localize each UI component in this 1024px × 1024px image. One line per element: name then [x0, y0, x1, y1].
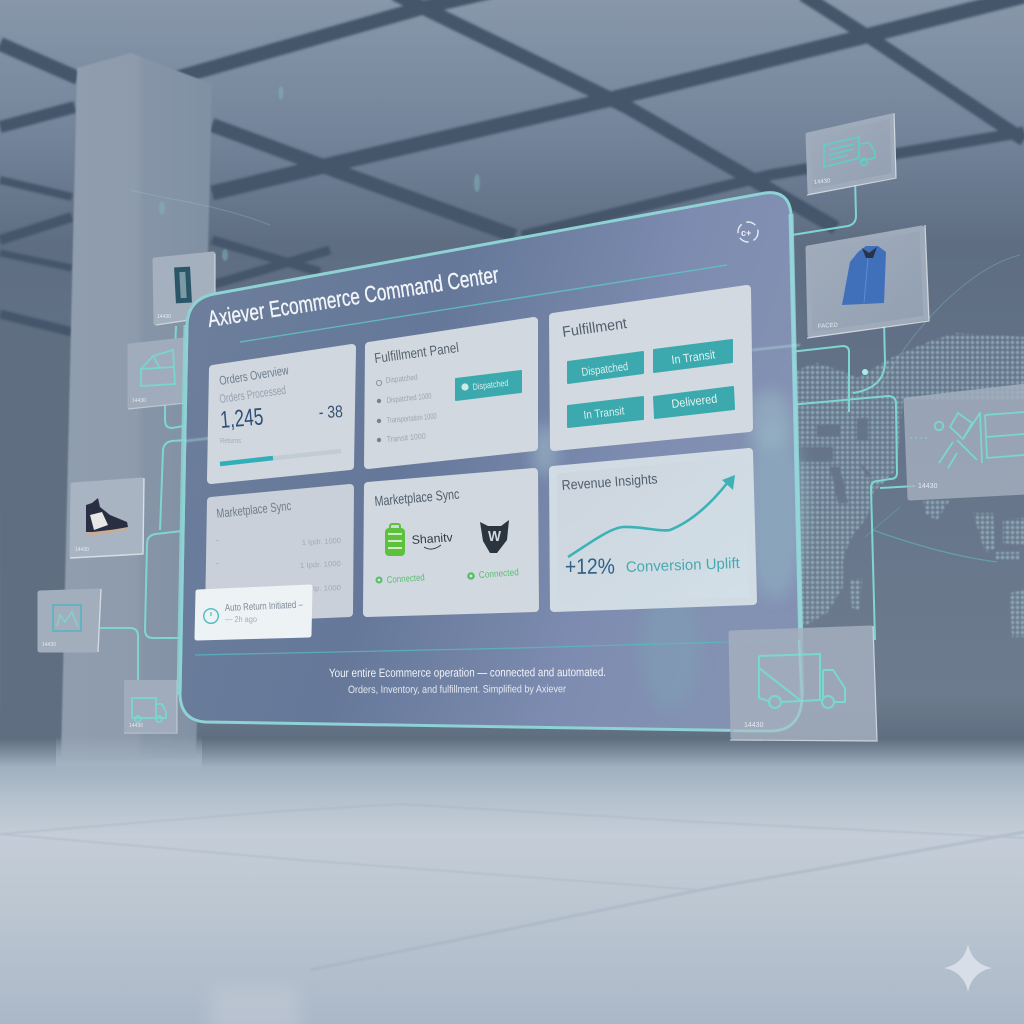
side card: delivery van invoice: 14430 — [814, 178, 831, 186]
glow: map through glass — [533, 390, 805, 710]
card: fulfillment panel: Dispatched — [385, 373, 418, 385]
card: revenue insights: +12% — [565, 554, 615, 579]
card: fulfillment status: Delivered — [671, 391, 718, 411]
card: marketplace sync connected: Marketplace Sync — [374, 486, 460, 509]
card: revenue insights: Conversion Uplift — [626, 555, 741, 576]
card: marketplace sync connected: Connected — [386, 572, 425, 586]
card: fulfillment status: Fulfillment — [561, 315, 629, 341]
shield logo: W — [488, 528, 502, 545]
footer text — [329, 665, 606, 696]
main glass dashboard panel — [179, 193, 805, 731]
side card: sneaker — [70, 478, 144, 558]
side card: sneaker: 14430 — [75, 547, 89, 553]
toast: auto return initiated: — 2h ago — [225, 615, 257, 624]
side card: large delivery truck — [730, 626, 877, 741]
card: orders overview: Returns — [220, 438, 241, 445]
toast: auto return initiated — [197, 587, 310, 638]
card: marketplace sync list — [209, 488, 350, 619]
panel title: Axiever Ecommerce Command Center — [206, 261, 501, 332]
card: fulfillment status — [553, 289, 749, 447]
card: revenue insights: Revenue Insights — [561, 470, 658, 493]
side card: package icon: 14430 — [132, 398, 146, 404]
side card: analytics chart — [40, 589, 101, 652]
side card: large delivery truck: 14430 — [744, 722, 764, 729]
card: marketplace sync connected: Connected — [478, 567, 519, 581]
shield logo — [480, 520, 509, 553]
side card: small delivery truck — [124, 680, 177, 733]
side card: map route — [906, 386, 1024, 498]
card: fulfillment panel: Transit 1000 — [386, 432, 427, 444]
card: orders overview: - 38 — [318, 402, 343, 422]
side card: package icon — [128, 340, 186, 409]
card: orders overview: 1,245 — [219, 403, 264, 434]
card: orders overview — [211, 348, 352, 480]
card: marketplace sync list: - — [216, 536, 219, 545]
card: fulfillment panel: Transportation 1000 — [386, 412, 437, 425]
card: fulfillment panel: Dispatched — [472, 378, 509, 392]
card: fulfillment status: In Transit — [671, 347, 717, 367]
card: marketplace sync list: - — [216, 559, 219, 568]
side card: small delivery truck: 14430 — [129, 723, 143, 729]
card: orders overview: Orders Processed — [218, 383, 287, 406]
card: marketplace sync list: 1 Ipdr. 1000 — [300, 559, 341, 570]
card: marketplace sync list: Ip. 1000 — [313, 583, 341, 593]
card: fulfillment panel: Fulfillment Panel — [373, 339, 460, 366]
card: marketplace sync connected — [367, 472, 535, 613]
toast: auto return initiated: Auto Return Initiated – — [225, 600, 303, 614]
connector lines — [100, 178, 915, 680]
side card: blue shirt: FACED — [818, 323, 839, 330]
side card: analytics chart: 14430 — [42, 642, 56, 648]
header divider — [240, 265, 727, 342]
card: fulfillment panel: Dispatched 1000 — [386, 391, 432, 405]
card: revenue insights — [553, 452, 753, 608]
footer divider — [195, 640, 798, 655]
side card: blue shirt — [807, 225, 929, 338]
shopify bag logo — [385, 524, 405, 556]
status icon — [738, 222, 758, 242]
side card: delivery van invoice — [807, 113, 896, 195]
card: marketplace sync list: 1 Ipdr. 1000 — [302, 536, 341, 547]
card: marketplace sync list: Marketplace Sync — [216, 498, 292, 521]
side card: product box: 14430 — [157, 314, 171, 320]
card: orders overview: Orders Overview — [218, 363, 290, 388]
side card: product box — [155, 254, 215, 325]
world map dots — [130, 190, 1024, 645]
card: fulfillment status: Dispatched — [581, 361, 629, 379]
card: marketplace sync connected: Shanitv — [411, 530, 453, 547]
footer text: Orders, Inventory, and fulfillment. Simplified by Axiever — [348, 683, 566, 696]
card: fulfillment panel — [368, 321, 534, 465]
status icon: c+ — [741, 228, 751, 238]
card: fulfillment status: In Transit — [583, 405, 626, 422]
gemini sparkle mark — [944, 944, 992, 992]
footer text: Your entire Ecommerce operation — connected and automated. — [329, 665, 606, 680]
side card: map route: 14430 — [918, 483, 938, 490]
